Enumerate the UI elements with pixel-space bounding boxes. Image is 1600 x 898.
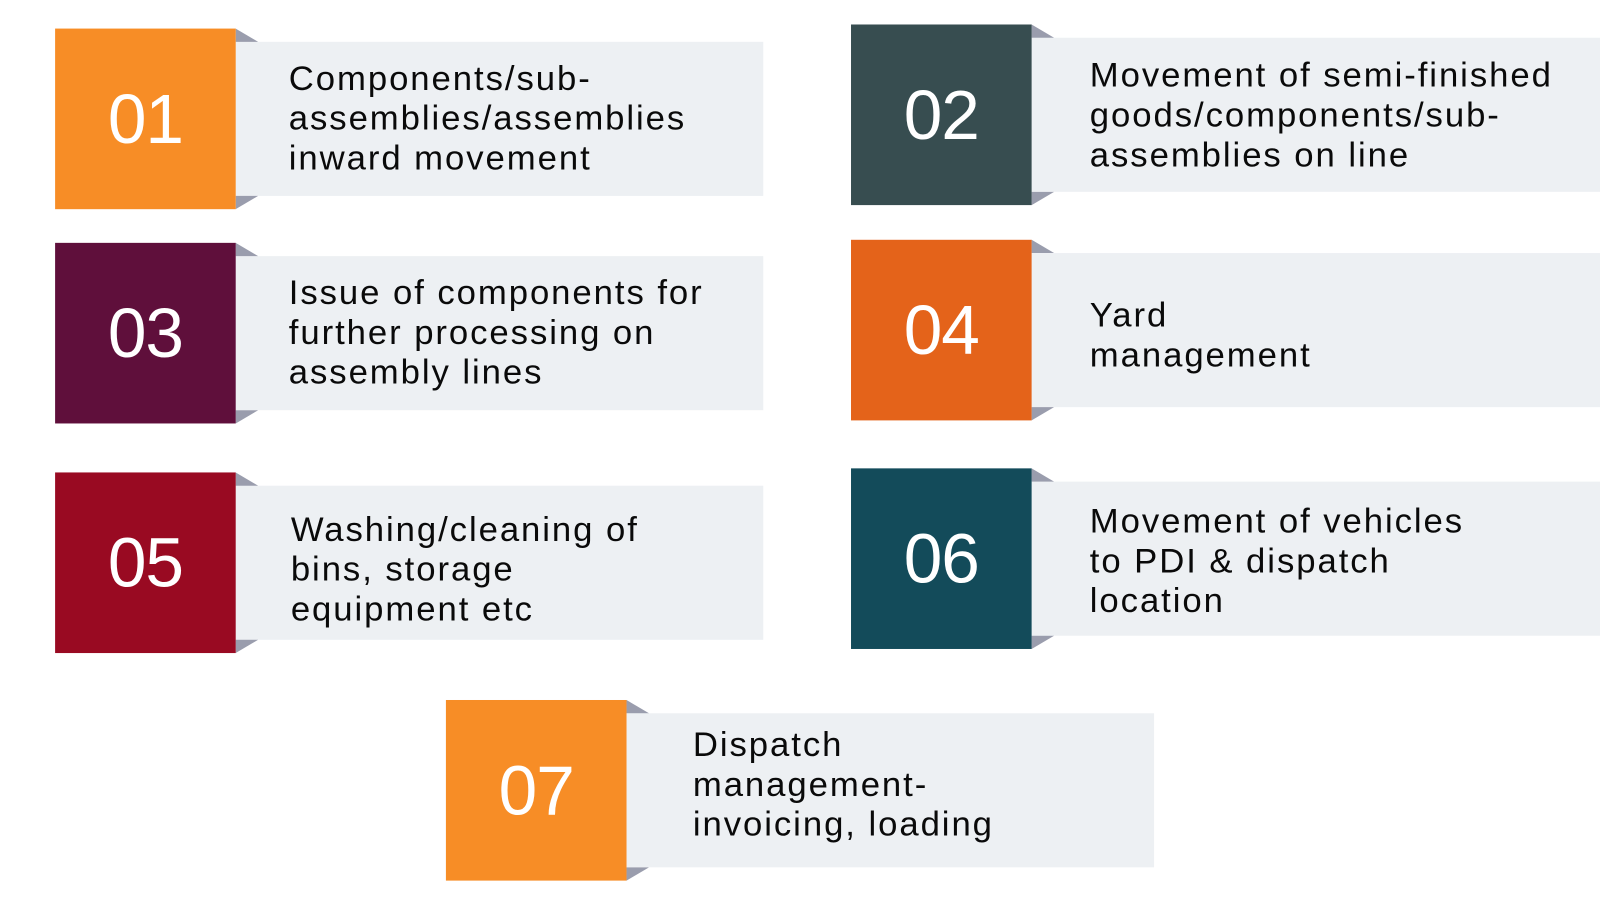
number 05: 05 <box>108 524 183 602</box>
text 01: inward movement <box>289 139 592 178</box>
bar 03 <box>236 256 763 410</box>
number 05 <box>55 472 236 653</box>
number 01 <box>55 29 236 209</box>
number 03: 03 <box>108 294 183 372</box>
number 07 <box>446 700 627 881</box>
text 04 <box>1090 296 1312 374</box>
number 04: 04 <box>904 291 979 369</box>
bar 02 <box>1032 38 1600 192</box>
text 01: assemblies/assemblies <box>289 99 686 138</box>
number 02: 02 <box>904 76 979 154</box>
bar 04 <box>1032 253 1600 407</box>
text 06: Movement of vehicles <box>1090 502 1464 541</box>
bar 06 <box>1032 482 1600 636</box>
number 01: 01 <box>108 80 183 158</box>
number 06 <box>851 468 1032 649</box>
bar 01 <box>236 42 763 196</box>
text 03: further processing on <box>289 313 655 352</box>
text 03: assembly lines <box>289 353 543 392</box>
text 02: Movement of semi-finished <box>1090 56 1553 95</box>
text 03 <box>289 273 704 392</box>
text 07 <box>693 726 994 844</box>
text 06: to PDI & dispatch <box>1090 542 1391 581</box>
text 02: goods/components/sub- <box>1090 96 1501 135</box>
number 06: 06 <box>904 520 979 597</box>
text 06: location <box>1090 582 1225 620</box>
text 07: Dispatch <box>693 726 843 764</box>
text 04: Yard <box>1090 296 1168 335</box>
card 01 <box>55 28 764 210</box>
text 01: Components/sub- <box>289 59 592 98</box>
text 05: Washing/cleaning of <box>291 510 639 549</box>
card 05 <box>55 472 764 654</box>
text 02 <box>1090 56 1553 174</box>
bar 05 <box>236 486 763 640</box>
card 06 <box>851 468 1600 649</box>
number 07: 07 <box>499 752 574 829</box>
card 02 <box>851 24 1600 206</box>
card 07 <box>446 700 1154 881</box>
text 07: invoicing, loading <box>693 805 994 844</box>
text 02: assemblies on line <box>1090 136 1410 174</box>
text 04: management <box>1090 336 1312 374</box>
text 05: equipment etc <box>291 590 534 629</box>
text 03: Issue of components for <box>289 273 704 312</box>
bar 07 <box>627 713 1154 867</box>
card 04 <box>851 240 1600 420</box>
text 07: management- <box>693 765 928 804</box>
text 05 <box>291 510 639 629</box>
text 05: bins, storage <box>291 550 515 589</box>
card 03 <box>55 242 764 424</box>
number 04 <box>851 240 1032 420</box>
number 02 <box>851 24 1032 205</box>
text 06 <box>1090 502 1464 620</box>
number 03 <box>55 243 236 423</box>
text 01 <box>289 59 686 178</box>
